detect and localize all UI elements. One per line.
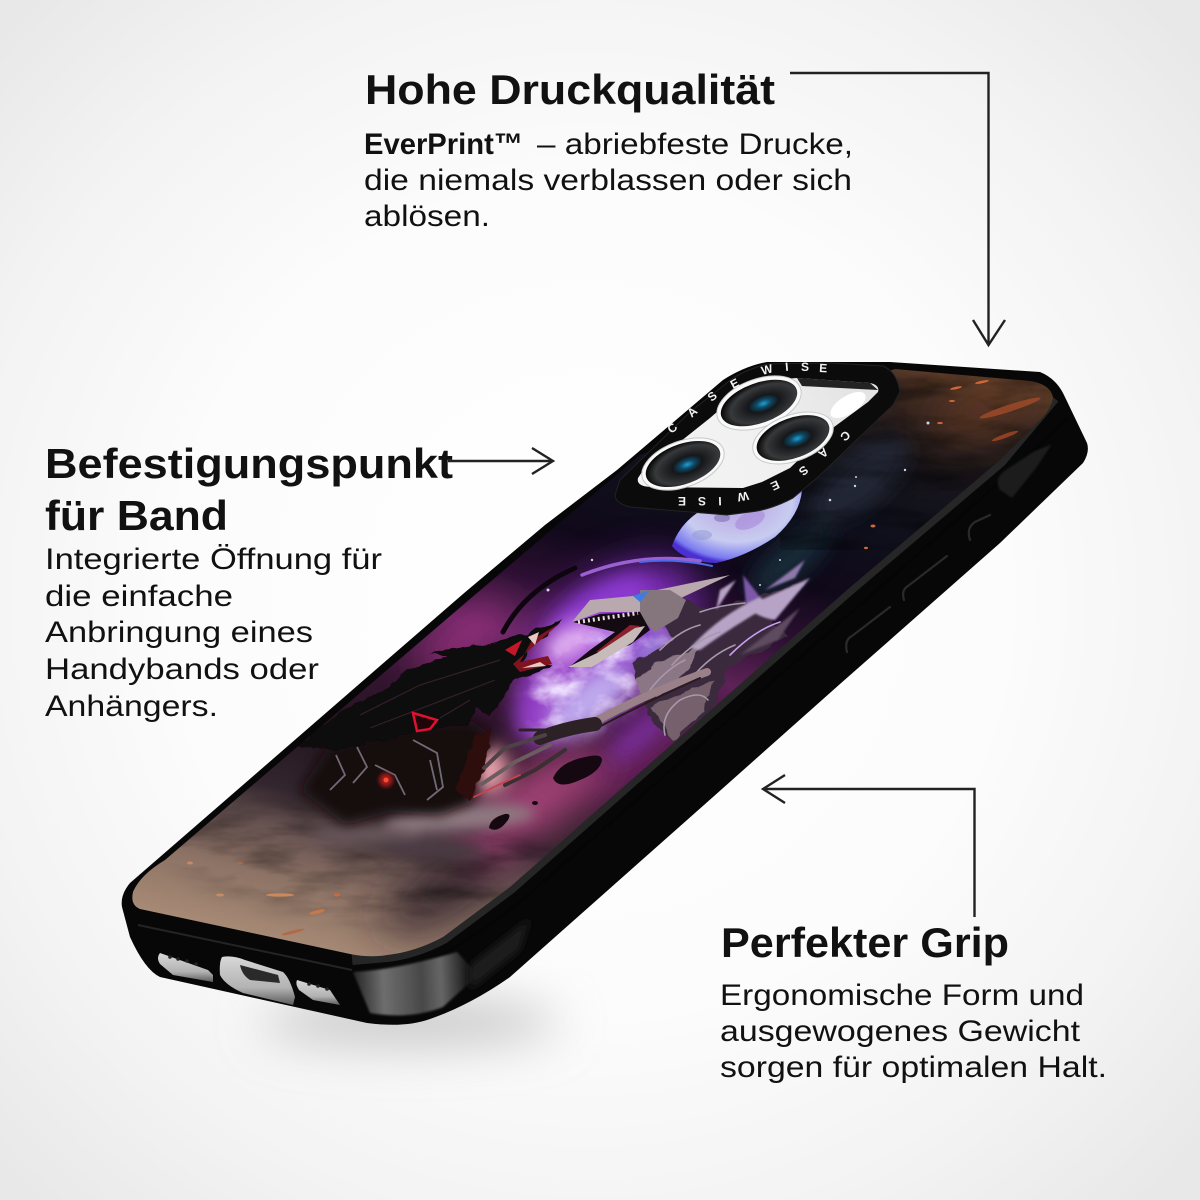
glossy bottom corner bbox=[353, 952, 478, 1015]
camera opening bbox=[638, 378, 878, 488]
artwork panel bbox=[132, 369, 1053, 956]
lavender cloud texture bbox=[524, 626, 674, 746]
USB port bbox=[220, 956, 295, 1005]
opening inner shadow bbox=[797, 378, 878, 390]
moon bbox=[672, 491, 802, 563]
side buttons bbox=[846, 515, 990, 652]
left speaker grill bbox=[158, 953, 213, 982]
action side bump bbox=[998, 444, 1052, 498]
heading: strap attachment: für Band bbox=[45, 492, 228, 539]
case body bbox=[122, 362, 1088, 1025]
text: grip description bbox=[720, 979, 1107, 1084]
callout: strap attachment bbox=[45, 440, 453, 723]
arrow: strap attachment bbox=[448, 448, 553, 474]
text: strap description: die einfache bbox=[45, 580, 233, 613]
side groove line bbox=[435, 418, 1068, 958]
lavender cloud bbox=[472, 612, 677, 794]
text: grip description: ausgewogenes Gewicht bbox=[720, 1015, 1081, 1048]
dust ridge bbox=[310, 800, 536, 864]
text: grip description: sorgen für optimalen Halt. bbox=[720, 1051, 1107, 1084]
dragon arm and claws bbox=[474, 672, 707, 797]
stars bbox=[546, 422, 930, 592]
heading: print quality: Hohe Druckqualität bbox=[365, 66, 775, 113]
dragon body bbox=[633, 583, 805, 740]
wolf mouth bbox=[505, 623, 560, 672]
dragon lower jaw bbox=[568, 626, 645, 667]
dragon ribs bbox=[650, 603, 780, 735]
purple halo bbox=[500, 563, 677, 768]
text: print quality description: ablösen. bbox=[364, 200, 490, 233]
camera flash bbox=[826, 387, 870, 423]
phone with case bbox=[100, 340, 1100, 1025]
text: print quality description: die niemals verblassen oder sich bbox=[364, 164, 852, 197]
text: strap description: Anhängers. bbox=[45, 690, 218, 723]
text: print quality description: – abriebfeste Drucke, bbox=[537, 128, 853, 161]
text: print quality description bbox=[364, 128, 853, 233]
bottom edge band bbox=[138, 925, 352, 970]
heading: perfect grip: Perfekter Grip bbox=[721, 919, 1009, 966]
lens right bbox=[746, 402, 840, 474]
text: print quality description: EverPrint™ bbox=[364, 128, 523, 161]
lens top bbox=[709, 365, 809, 441]
wolf fur highlights bbox=[360, 660, 500, 728]
crescent arcs bbox=[503, 558, 712, 632]
callout: print quality bbox=[364, 66, 853, 233]
wolf ruff bbox=[455, 730, 492, 800]
side highlight near corner bbox=[470, 918, 530, 990]
text: strap description bbox=[45, 543, 382, 723]
floating rocks bbox=[489, 756, 602, 830]
cloud texture: dust bbox=[182, 801, 553, 926]
red ember on figure bbox=[379, 773, 393, 787]
ring branding top: CASEWISE bbox=[664, 360, 828, 436]
heading: strap attachment: Befestigungspunkt bbox=[45, 440, 453, 487]
soft dark mass under wolf bbox=[300, 720, 492, 825]
text: strap description: Integrierte Öffnung für bbox=[45, 543, 382, 576]
dragon skull and upper jaw bbox=[572, 575, 730, 632]
phone drop shadow bbox=[260, 998, 560, 1046]
heading: strap attachment bbox=[45, 440, 453, 539]
wolf bbox=[297, 620, 562, 750]
cloud texture: top bbox=[780, 374, 1052, 550]
ring branding bottom: CASEWISE bbox=[678, 428, 853, 508]
side rim band bbox=[352, 397, 1053, 958]
right speaker grill bbox=[296, 980, 340, 1005]
lens left bbox=[635, 428, 731, 500]
arrow: print quality bbox=[790, 73, 1005, 345]
text: grip description: Ergonomische Form und bbox=[720, 979, 1084, 1012]
dragon spikes bbox=[690, 560, 810, 655]
nebula glows bbox=[371, 367, 1039, 948]
text: strap description: Anbringung eines bbox=[45, 616, 313, 649]
text: strap description: Handybands oder bbox=[45, 653, 319, 686]
orange embers bbox=[187, 379, 1042, 936]
red hood bbox=[413, 713, 437, 731]
callout: perfect grip bbox=[720, 919, 1107, 1084]
rock figures bbox=[330, 740, 443, 800]
teal haze behind dragon bbox=[748, 436, 912, 595]
camera ring bbox=[615, 360, 900, 515]
arrow: perfect grip bbox=[763, 775, 974, 917]
dragon mouth bbox=[568, 612, 650, 668]
